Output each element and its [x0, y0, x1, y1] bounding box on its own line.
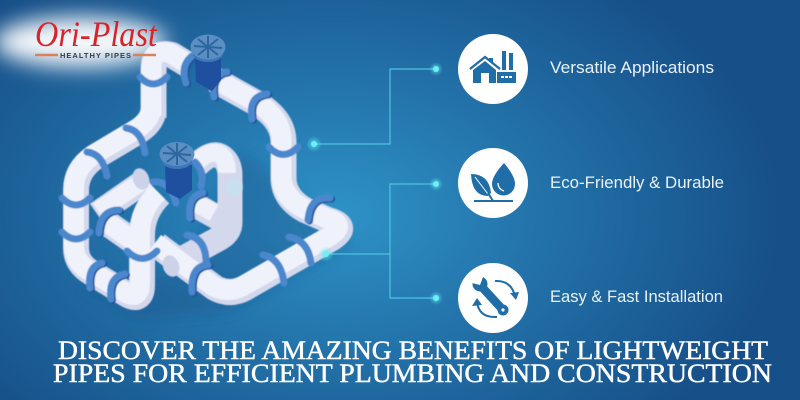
pipe cap — [130, 166, 152, 192]
pipe shadow — [80, 150, 352, 320]
collar inner edges — [91, 57, 332, 300]
logo: Ori-Plast: Ori-Plast — [35, 14, 158, 54]
label: Easy & Fast Installation: Easy & Fast Installation — [550, 287, 723, 306]
icon: house and factory — [458, 34, 528, 104]
pipe network illustration — [62, 52, 340, 300]
main pipes highlight — [74, 52, 338, 295]
title: PIPES FOR EFFICIENT PLUMBING AND CONSTRUCTION — [53, 359, 772, 388]
blue collars — [62, 56, 330, 299]
back pipes highlight — [98, 153, 227, 213]
title: DISCOVER THE AMAZING BENEFITS OF LIGHTWEIGHT — [58, 336, 768, 365]
logo glow — [0, 17, 166, 67]
connector: upper — [306, 62, 443, 152]
valve: lower — [160, 142, 194, 199]
icon: wrench with arrows — [458, 263, 528, 333]
icon: leaf and water drop — [458, 148, 528, 218]
main pipes shading — [76, 54, 340, 297]
water splash — [225, 178, 243, 196]
connector: lower — [318, 177, 443, 305]
label: Eco-Friendly & Durable: Eco-Friendly & Durable — [550, 173, 724, 192]
title — [53, 336, 772, 388]
back pipes shading — [97, 155, 230, 260]
label: Versatile Applications: Versatile Applications — [550, 58, 714, 77]
logo: Ori-Plast: HEALTHY PIPES — [60, 51, 131, 60]
valve: upper — [190, 34, 226, 91]
junction shading — [160, 253, 182, 279]
